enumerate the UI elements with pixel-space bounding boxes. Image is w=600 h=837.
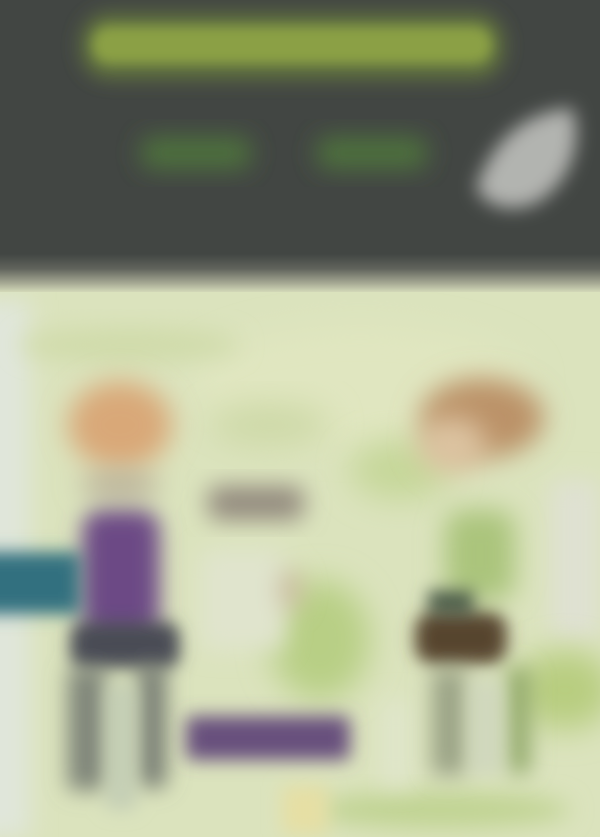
left figure purple torso — [82, 510, 160, 635]
bottom yellow tag — [282, 786, 328, 834]
centre: pale panel with details — [200, 550, 302, 650]
left figure teal sleeve — [0, 552, 80, 614]
subtitle: right green text block — [316, 136, 428, 170]
left figure legs — [68, 665, 166, 790]
left figure pale trouser leg — [106, 685, 136, 810]
left figure dark waist — [70, 622, 180, 668]
right figure face — [418, 417, 486, 473]
right figure dark collar — [428, 590, 474, 614]
right figure green shirt — [445, 510, 515, 600]
right figure: person — [415, 378, 544, 775]
right figure dark waist — [415, 612, 507, 664]
header panel: dark band — [0, 0, 600, 292]
subtitle: left green text block — [140, 136, 252, 170]
left figure neck shadow — [80, 471, 160, 499]
icon: pale grey badge — [476, 108, 576, 208]
title bar: green rounded banner — [80, 12, 505, 80]
left figure hair and face — [68, 381, 172, 469]
background: lower illustration area — [0, 280, 600, 837]
right figure legs — [432, 668, 530, 775]
right figure pale trouser leg — [470, 680, 502, 775]
right figure hair — [420, 378, 544, 458]
purple label bar — [186, 716, 350, 760]
centre object: muted mauve band — [208, 486, 304, 520]
left figure: person — [0, 381, 180, 810]
